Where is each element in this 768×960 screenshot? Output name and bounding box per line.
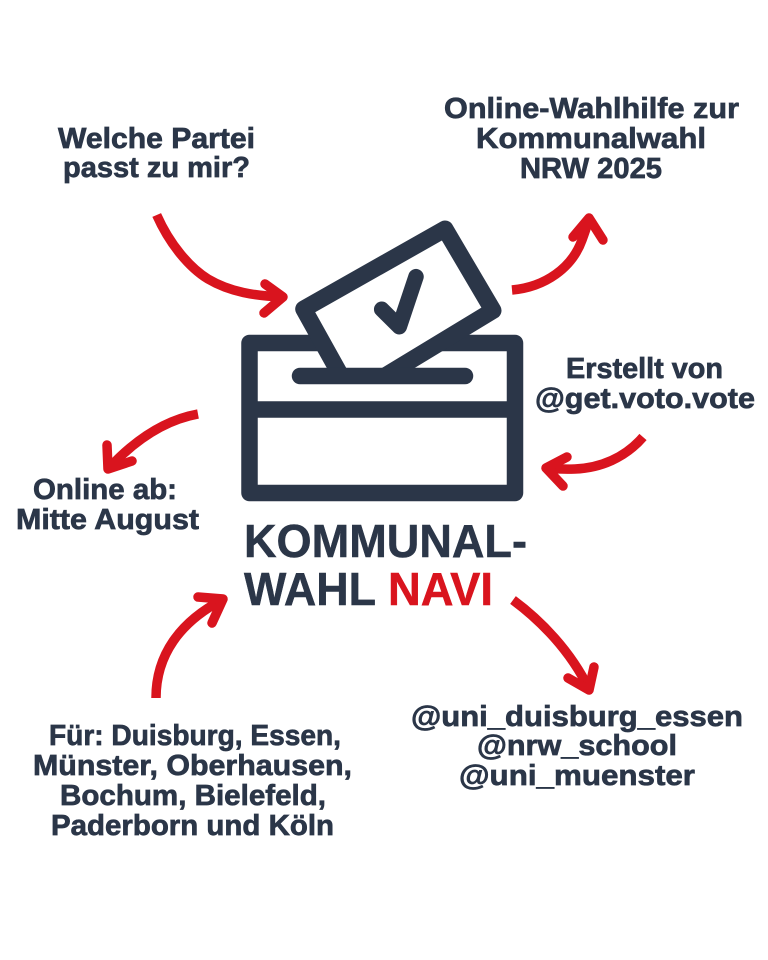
text: cities: Münster, Oberhausen, xyxy=(33,750,352,782)
icon: ballot paper xyxy=(304,229,493,376)
logo wordmark xyxy=(244,515,527,615)
text: online tool xyxy=(444,93,739,185)
text: created by: Erstellt von xyxy=(566,353,723,385)
text: online tool: NRW 2025 xyxy=(520,153,662,185)
arrow: logo to partners xyxy=(513,600,594,690)
text: cities: Für: Duisburg, Essen, xyxy=(49,720,341,752)
text: online tool: Kommunalwahl xyxy=(476,123,706,155)
logo line 2 red: NAVI xyxy=(388,563,493,615)
text: online tool: Online-Wahlhilfe zur xyxy=(444,93,739,125)
text: cities: Bochum, Bielefeld, xyxy=(60,780,326,812)
text: cities xyxy=(33,720,352,842)
arrow: cities to logo xyxy=(156,597,223,698)
text: question: passt zu mir? xyxy=(63,152,250,184)
icon: ballot box with ballot xyxy=(250,229,515,493)
text: partner accounts: @uni_muenster xyxy=(459,760,695,792)
text: online date: Mitte August xyxy=(16,504,199,536)
text: partner accounts: @nrw_school xyxy=(477,730,677,762)
arrow: box to online date xyxy=(107,414,198,469)
text: partner accounts xyxy=(411,701,743,792)
text: created by: @get.voto.vote xyxy=(535,383,755,415)
text: online date: Online ab: xyxy=(33,474,177,506)
icon: ballot slot xyxy=(300,368,465,384)
text: cities: Paderborn und Köln xyxy=(51,810,334,842)
text: partner accounts: @uni_duisburg_essen xyxy=(411,701,743,733)
text: online date xyxy=(16,474,199,536)
logo line 1: KOMMUNAL- xyxy=(244,515,527,567)
logo line 2 dark: WAHL xyxy=(244,563,376,615)
arrow: question to ballot xyxy=(157,215,283,313)
arrow: ballot to online tool xyxy=(512,218,603,290)
icon: box body xyxy=(250,343,515,493)
arrow: creator to box xyxy=(546,437,643,486)
text: created by xyxy=(535,353,755,415)
text: question: Welche Partei xyxy=(58,123,255,155)
icon: check mark xyxy=(382,277,416,327)
text: question xyxy=(58,123,255,184)
